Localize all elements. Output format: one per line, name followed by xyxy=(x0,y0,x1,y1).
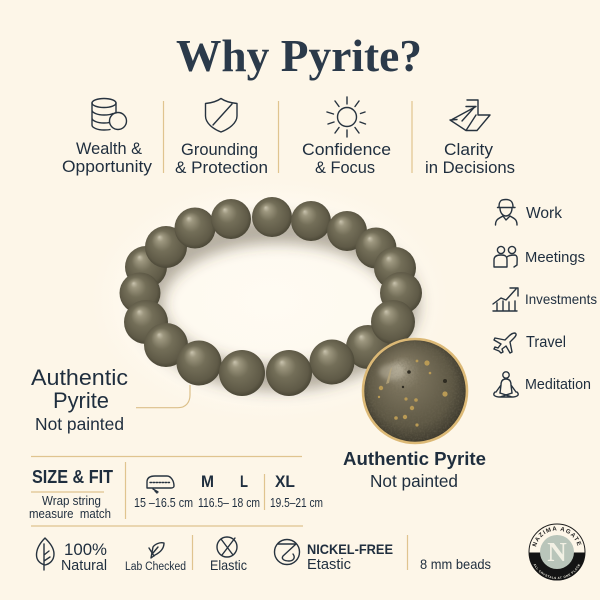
benefit: clarity in decisions xyxy=(425,100,515,177)
features row xyxy=(36,535,491,574)
size labels: M xyxy=(201,473,214,491)
size heading: SIZE & FIT xyxy=(32,467,113,487)
callout: authentic pyrite left xyxy=(31,365,190,434)
benefits row xyxy=(62,97,515,177)
logo: Nazima Agate: N xyxy=(547,537,567,567)
pyrite close-up bead xyxy=(363,339,467,443)
size labels: 19.5–21 cm xyxy=(270,495,323,510)
feature: natural xyxy=(36,538,107,574)
benefit: confidence and focus: Confidence xyxy=(302,140,391,159)
benefit: wealth and opportunity: Opportunity xyxy=(62,157,153,176)
use: meditation xyxy=(494,372,591,397)
use: meetings xyxy=(494,246,585,267)
logo: Nazima Agate: NAZIMA AGATE xyxy=(532,526,582,547)
use: meetings: Meetings xyxy=(525,249,585,266)
benefit: confidence and focus: & Focus xyxy=(315,158,375,177)
icon: shield xyxy=(206,98,237,132)
callout: authentic pyrite right: Not painted xyxy=(370,471,458,491)
feature: nickel free elastic: Etastic xyxy=(307,556,351,573)
use: work xyxy=(496,200,562,225)
benefit: clarity in decisions: in Decisions xyxy=(425,158,515,177)
icon: folded path xyxy=(450,100,490,130)
callout: authentic pyrite right: Authentic Pyrite xyxy=(343,448,486,469)
logo: Nazima Agate xyxy=(528,524,586,580)
callout: authentic pyrite left: Not painted xyxy=(35,414,124,434)
callout: authentic pyrite left: Pyrite xyxy=(53,388,109,413)
feature: elastic: Elastic xyxy=(210,557,247,573)
size and fit panel xyxy=(29,456,323,526)
feature: nickel free elastic xyxy=(274,540,393,573)
title: Why Pyrite? xyxy=(176,30,422,81)
feature: natural: Natural xyxy=(61,557,107,574)
benefit: grounding and protection: Grounding xyxy=(181,140,258,159)
benefit: grounding and protection xyxy=(175,98,268,177)
bracelet xyxy=(120,197,422,396)
use: meditation: Meditation xyxy=(525,376,591,393)
callout: authentic pyrite right xyxy=(343,448,486,491)
use: investments: Investments xyxy=(525,291,597,307)
callout: authentic pyrite left: Authentic xyxy=(31,365,128,390)
feature: natural: 100% xyxy=(64,541,107,559)
feature: nickel free elastic: NICKEL-FREE xyxy=(307,541,393,557)
size labels xyxy=(134,473,323,510)
use: travel xyxy=(494,333,566,353)
use cases list xyxy=(493,200,597,397)
benefit: clarity in decisions: Clarity xyxy=(444,140,494,159)
use: investments xyxy=(493,288,597,311)
benefit: wealth and opportunity: Wealth & xyxy=(76,139,143,158)
feature: lab checked: Lab Checked xyxy=(125,561,186,573)
feature: bead size: 8 mm beads xyxy=(420,556,491,572)
benefit: grounding and protection: & Protection xyxy=(175,158,268,177)
icon: sun xyxy=(327,97,366,137)
icon: coin stack xyxy=(92,98,126,130)
benefit: confidence and focus xyxy=(302,97,391,177)
size labels: L xyxy=(240,473,248,491)
size labels: XL xyxy=(275,473,295,491)
size labels: 15 –16.5 cm xyxy=(134,495,193,510)
size labels: 116.5– 18 cm xyxy=(198,495,260,510)
benefit: wealth and opportunity xyxy=(62,98,153,176)
feature: elastic xyxy=(210,537,247,573)
use: work: Work xyxy=(526,205,562,222)
measuring note: Wrap string xyxy=(42,493,101,508)
use: travel: Travel xyxy=(526,334,566,351)
measuring note xyxy=(29,493,111,521)
feature: lab checked xyxy=(125,543,186,573)
logo: Nazima Agate: ALL CRYSTALS AT ONE PLACE xyxy=(534,564,580,579)
measuring note: measure match xyxy=(29,506,111,521)
icon: measuring tape xyxy=(147,476,174,493)
